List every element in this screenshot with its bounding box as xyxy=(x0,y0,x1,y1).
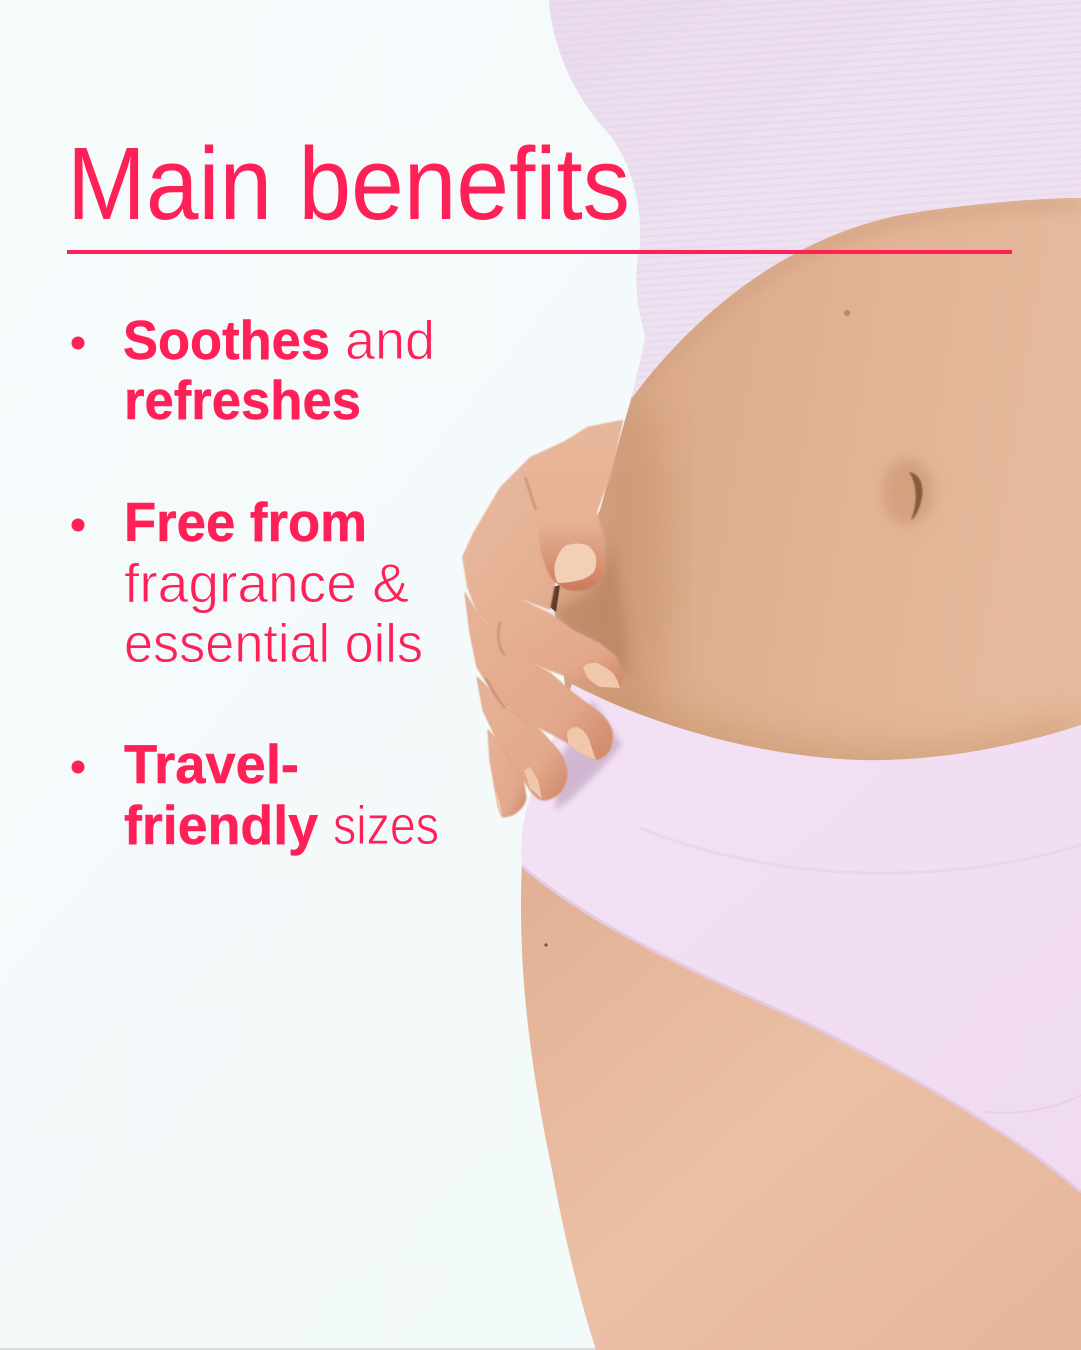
skin mark xyxy=(844,310,850,316)
benefit 3: travel-friendly sizes: sizes xyxy=(333,794,439,856)
middle finger xyxy=(465,593,613,760)
nail: pinky xyxy=(496,790,502,815)
nail: ring xyxy=(524,767,542,799)
benefit 1: soothes and refreshes xyxy=(72,309,435,431)
nail: index xyxy=(583,663,620,688)
thumb xyxy=(525,420,623,591)
benefit 2: free from fragrance and essential oils: essential oils xyxy=(124,612,423,674)
shadow under hand xyxy=(552,530,630,675)
benefit 2: free from fragrance and essential oils: Free from xyxy=(124,491,367,553)
finger creases xyxy=(486,477,536,708)
bullet xyxy=(72,760,84,774)
crop top xyxy=(549,0,1081,398)
benefit 3: travel-friendly sizes xyxy=(72,733,439,856)
torso skin xyxy=(553,150,1081,800)
leg skin xyxy=(521,860,1081,1350)
underwear xyxy=(521,684,1081,1192)
benefit 1: soothes and refreshes: Soothes xyxy=(123,309,330,371)
navel xyxy=(882,458,934,526)
benefit 3: travel-friendly sizes: Travel- xyxy=(124,733,299,795)
nail: thumb xyxy=(554,544,596,583)
bullet xyxy=(72,518,84,532)
gap between thumb and index xyxy=(546,585,560,612)
back of hand xyxy=(462,420,623,640)
photo: torso with crop top, underwear and hand xyxy=(462,0,1081,1350)
benefit 1: soothes and refreshes: refreshes xyxy=(124,369,361,431)
ring finger xyxy=(477,677,567,800)
benefit 1: soothes and refreshes: and xyxy=(345,309,435,371)
bullet xyxy=(72,336,84,350)
nail: middle xyxy=(567,727,596,760)
title: Main benefits xyxy=(67,126,630,241)
pinky finger xyxy=(488,730,526,817)
index finger xyxy=(483,600,624,688)
benefit 2: free from fragrance and essential oils xyxy=(72,491,423,674)
benefit 3: travel-friendly sizes: friendly xyxy=(124,794,318,856)
torso shading xyxy=(570,205,1081,768)
hand xyxy=(462,420,630,817)
benefit 2: free from fragrance and essential oils: fragrance & xyxy=(124,552,409,614)
title rule xyxy=(67,250,1012,254)
